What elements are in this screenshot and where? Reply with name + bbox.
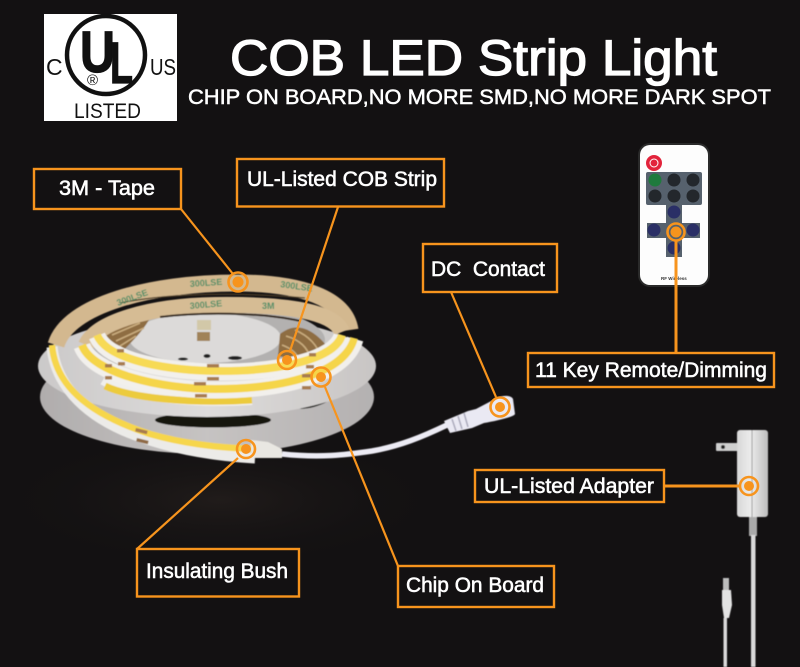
UL listed logo: LISTED [74,100,141,123]
callout: UL-listed COB strip: UL-Listed COB Strip [247,168,437,191]
strip loop 1 [97,336,342,372]
COB chip pads [105,349,316,398]
DC plug [723,578,729,591]
callout: UL-listed COB strip [237,159,444,369]
tape print: 300LSE [189,298,223,311]
UL listed logo: C [46,54,63,80]
power button [646,155,662,171]
UL listed logo: US [150,54,176,80]
remote control [638,143,710,287]
function key panel [646,172,702,205]
callout: 11 key remote: 11 Key Remote/Dimming [535,359,767,382]
callout: insulating bush [137,440,299,596]
coiled tape right [278,327,330,358]
tape print: 300LSE [115,287,149,308]
callout: UL-listed adapter [475,470,758,502]
UL listed logo: L [110,31,133,96]
remote caption: RF Wireless [661,276,687,281]
callout: chip on board [312,368,554,607]
upper reel disc [38,315,376,417]
tape print: 3M [262,301,275,311]
direction key panel [647,205,700,257]
insulating bush [251,440,282,458]
UL listed logo: U [80,20,115,85]
callout: UL-listed adapter: UL-Listed Adapter [484,475,654,498]
tape print [115,277,313,311]
outer strip [52,347,255,458]
callout: chip on board: Chip On Board [406,574,544,597]
subtitle: CHIP ON BOARD,NO MORE SMD,NO MORE DARK SPOT [188,86,771,109]
power adapter [716,430,768,667]
callout: DC contact: DC Contact [431,258,545,281]
strip loop 2 [82,339,355,390]
callout: insulating bush: Insulating Bush [146,560,288,583]
LED strip reel photo [38,277,515,458]
DC connector [444,396,515,433]
coiled tape left [105,319,149,352]
tape print: 300LSE [189,277,223,289]
tape backing outer band [56,283,350,345]
lower reel disc [40,340,374,454]
UL listed logo: ® [87,72,98,89]
callout: DC contact [423,244,557,416]
rear hidden strip [103,380,252,401]
callout: 11 key remote [528,224,774,387]
center hub [85,304,325,376]
callout: 3M tape [34,169,248,292]
title: COB LED Strip Light [230,30,717,86]
callout: 3M tape: 3M - Tape [59,177,155,200]
cable [282,425,447,456]
tape print: 300LSE [280,279,313,294]
UL listed logo [44,14,177,123]
tape backing inner band [86,305,342,345]
